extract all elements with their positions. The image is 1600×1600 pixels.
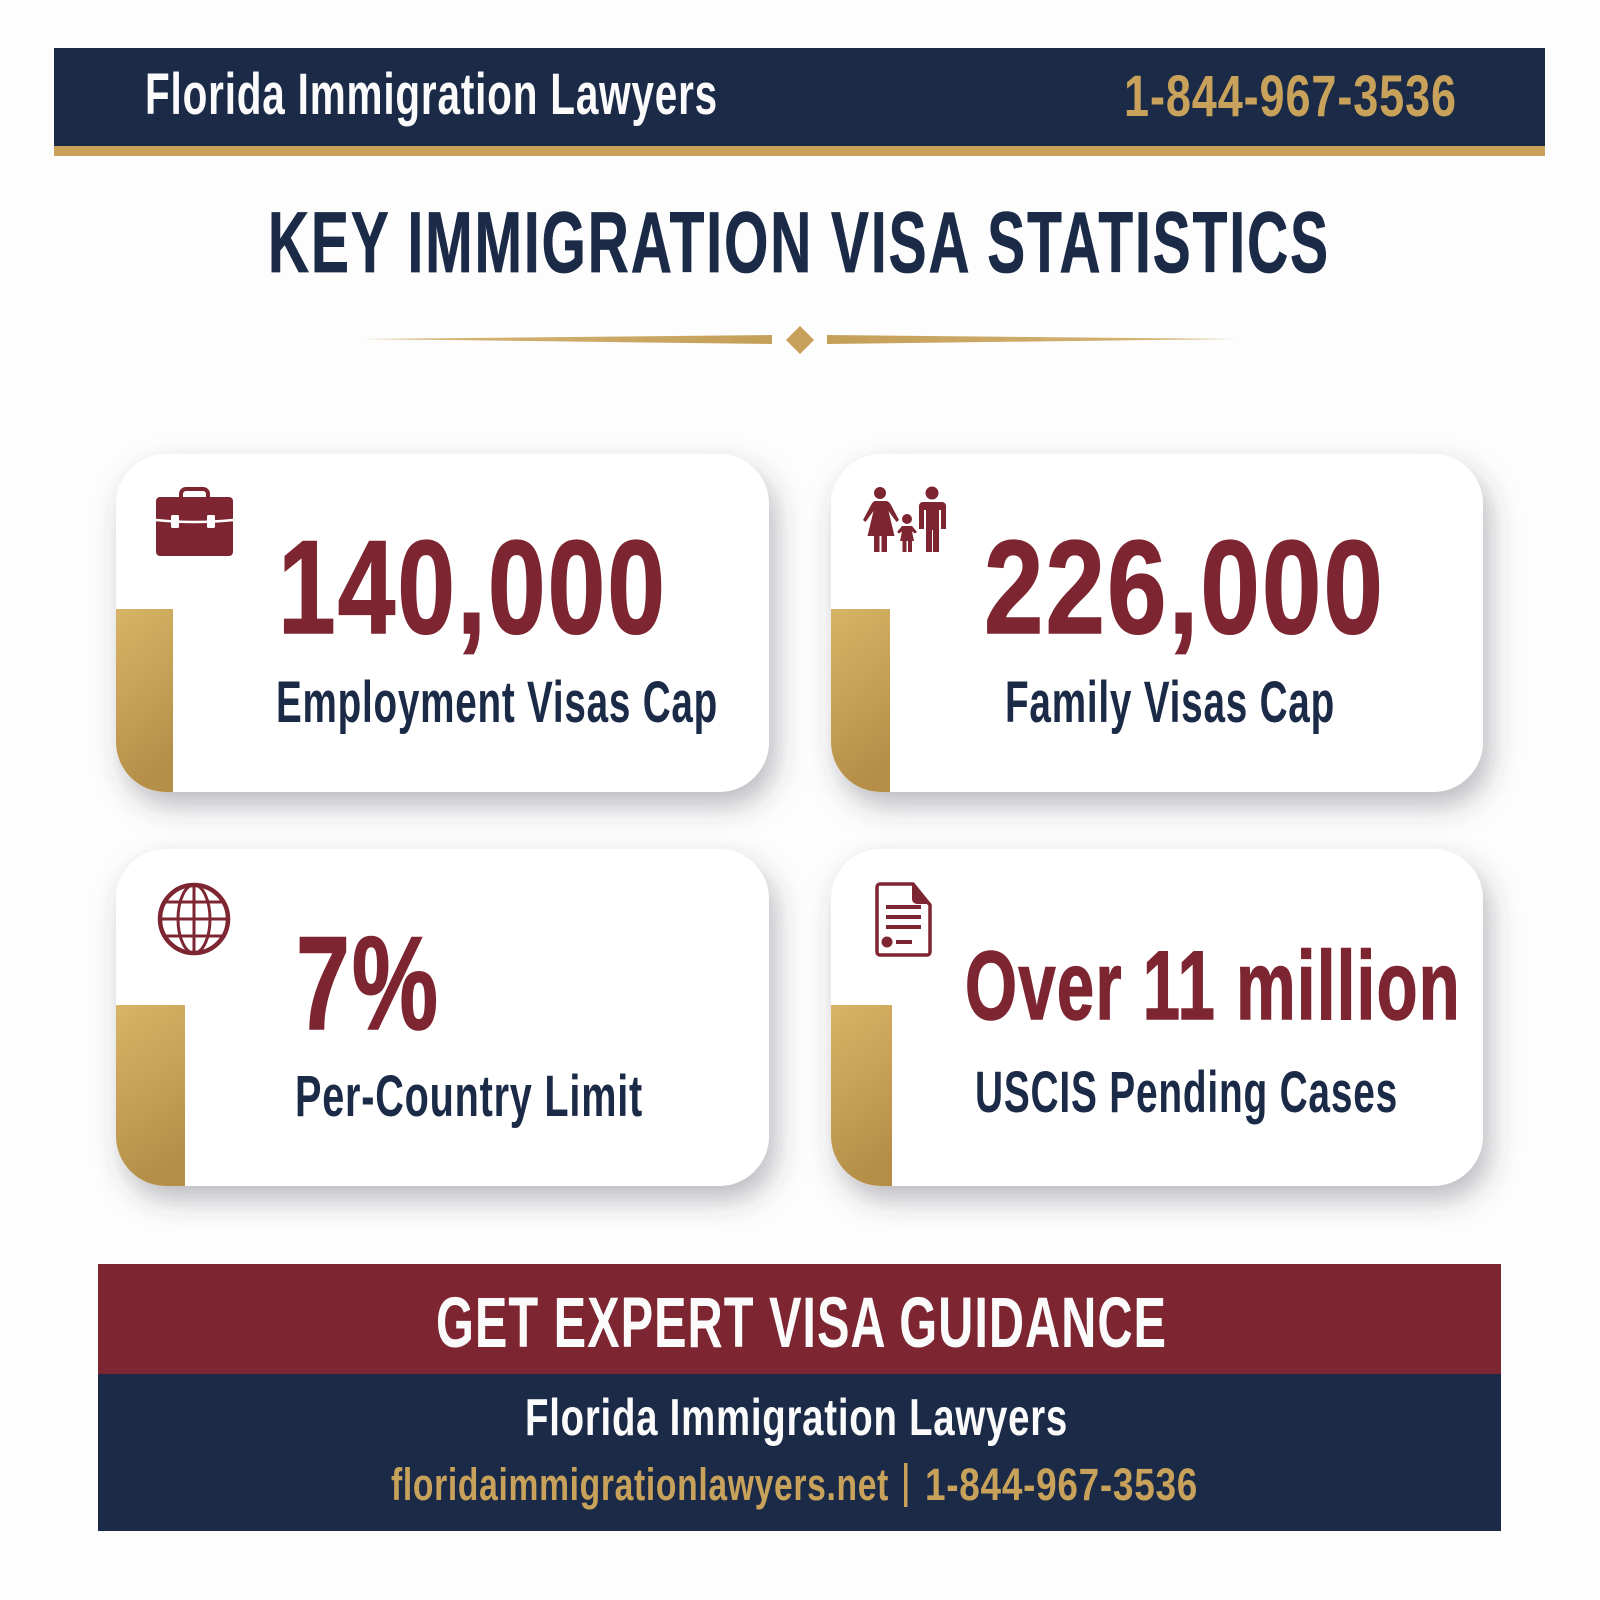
icon: family xyxy=(863,486,946,552)
icon: document xyxy=(877,884,930,955)
header firm name: Florida Immigration Lawyers xyxy=(145,62,718,127)
footer separator xyxy=(904,1463,908,1507)
stat value: 7% xyxy=(296,910,440,1058)
panel: employment visas xyxy=(116,454,769,792)
header phone number: 1-844-967-3536 xyxy=(1124,64,1457,129)
stat value: 140,000 xyxy=(278,514,667,662)
stat label: USCIS Pending Cases xyxy=(975,1060,1398,1125)
title divider xyxy=(362,326,1237,354)
panel: per-country limit xyxy=(116,849,769,1186)
stat label: Family Visas Cap xyxy=(1005,670,1335,735)
header bar xyxy=(54,48,1545,156)
footer phone: 1-844-967-3536 xyxy=(925,1459,1198,1510)
call to action footer xyxy=(98,1264,1501,1531)
stat label: Employment Visas Cap xyxy=(276,670,718,735)
CTA heading: GET EXPERT VISA GUIDANCE xyxy=(436,1284,1167,1363)
panel: USCIS pending cases xyxy=(831,849,1483,1186)
icon: briefcase xyxy=(156,489,233,556)
footer firm name: Florida Immigration Lawyers xyxy=(525,1389,1068,1447)
stat value: 226,000 xyxy=(984,514,1385,662)
footer website: floridaimmigrationlawyers.net xyxy=(391,1459,889,1510)
icon: globe xyxy=(160,885,228,953)
stat label: Per-Country Limit xyxy=(295,1064,643,1129)
panel: family visas xyxy=(831,454,1483,792)
